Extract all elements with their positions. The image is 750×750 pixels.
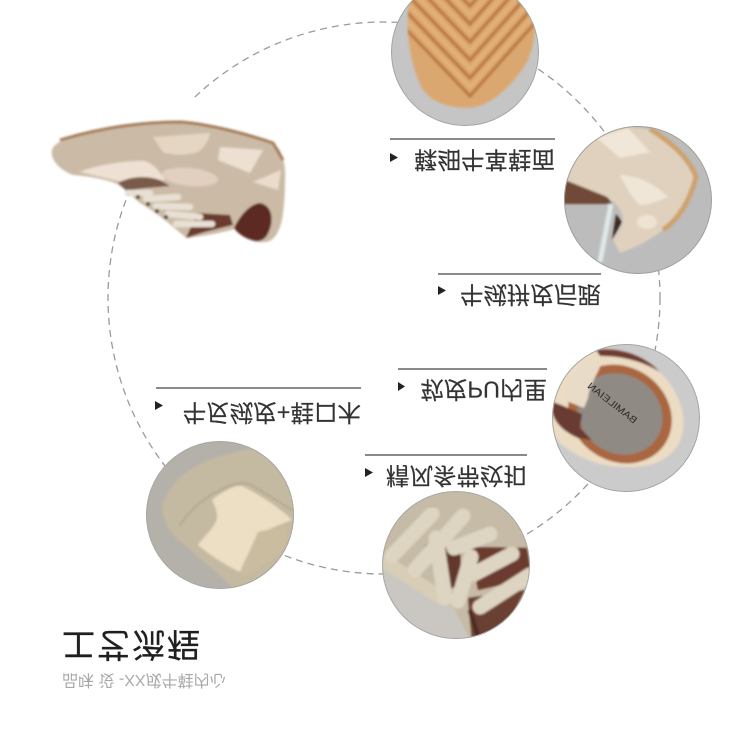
caption: laces: 精风条带纹扣 xyxy=(386,462,527,488)
insole brand text: BAMILEIAN xyxy=(585,381,639,426)
arrow: marker 4 xyxy=(365,468,373,477)
caption: heel: 牛绒拼皮后跟 xyxy=(460,282,601,308)
product image: main shoe xyxy=(52,122,285,242)
title: 工艺流程 xyxy=(62,626,202,663)
arrow: marker 2 xyxy=(438,286,446,295)
thumbnail: toe cap xyxy=(146,441,294,589)
dashed connecting circle xyxy=(108,22,660,574)
subtitle: 品味 设 -XX成牛鞋内心 xyxy=(62,671,226,688)
arrow: marker 5 xyxy=(155,401,163,410)
thumbnail: laces xyxy=(378,487,534,643)
arrow: marker 3 xyxy=(398,382,405,391)
thumbnail: insole xyxy=(548,340,704,496)
caption: lining: 软皮PU内里 xyxy=(420,376,547,402)
thumbnail: outsole tread xyxy=(391,0,539,126)
caption: upper material: 鞣细牛革鞋面 xyxy=(414,146,555,172)
thumbnail: heel xyxy=(560,122,716,278)
arrow: marker 1 xyxy=(390,153,398,162)
caption: collar: 牛反绒皮+鞋口木 xyxy=(183,400,361,426)
